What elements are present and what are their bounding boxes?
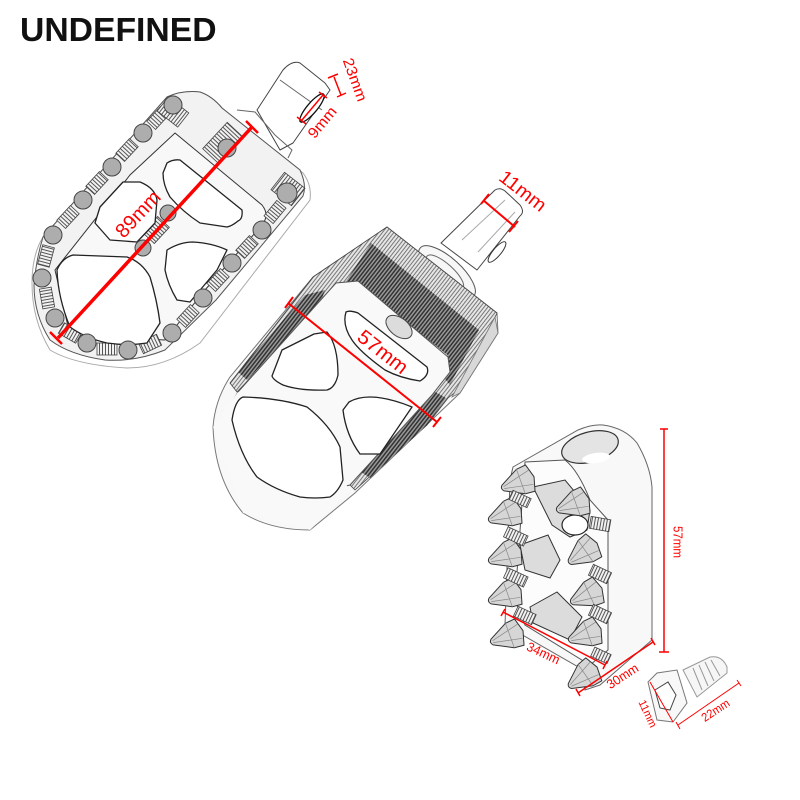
- dimension: 9mm: 9mm: [305, 103, 341, 142]
- axle: [411, 189, 522, 306]
- body: [505, 425, 652, 690]
- hole: upper left: [272, 332, 338, 390]
- right side face: [452, 317, 498, 397]
- ribbed band: light ends: [230, 227, 497, 490]
- dimension: 57mm height: 57mm: [671, 526, 686, 558]
- dimension: 22mm bolt: [676, 680, 741, 729]
- inner opening: [215, 281, 450, 510]
- dimension: 23mm: 23mm: [339, 56, 370, 104]
- hole: large: [57, 255, 160, 344]
- platform outline: [213, 227, 498, 530]
- dimension: 30mm: [576, 638, 655, 696]
- footpeg 3: spiked platform: [484, 425, 652, 698]
- inner frame: [55, 133, 266, 340]
- footpeg 1: toothed platform: [32, 62, 330, 368]
- dimension: 89mm length: [50, 121, 258, 344]
- hole: right: [165, 242, 227, 302]
- spikes: [484, 464, 608, 698]
- mounting hole: [558, 425, 622, 469]
- dimension: 22mm bolt: 22mm: [699, 696, 732, 725]
- dimension: 57mm width: 57mm: [353, 326, 412, 379]
- platform body: [34, 92, 304, 360]
- dimension: 11mm axle: [481, 167, 550, 232]
- hole: left: [95, 182, 157, 242]
- dimension: 57mm width: [285, 297, 441, 427]
- rib blocks: [38, 97, 305, 355]
- title: UNDEFINED: [20, 11, 217, 49]
- ribbed band: dark centres: [238, 243, 479, 478]
- mounting tab: [237, 62, 330, 158]
- cut-out: [562, 515, 588, 535]
- hole: upper centre: [163, 160, 242, 227]
- dimension: 23mm: [328, 56, 370, 104]
- dimension: 11mm bolt: 11mm: [636, 698, 659, 730]
- dimension: 89mm length: 89mm: [111, 187, 166, 242]
- front face: [515, 460, 608, 665]
- bolt: [648, 657, 727, 722]
- dimension: 57mm height: [659, 429, 686, 652]
- grit pads: [520, 480, 590, 640]
- platform outline: [32, 92, 310, 368]
- dimension: 34mm: 34mm: [524, 639, 562, 667]
- hole: top right: [345, 311, 428, 381]
- dimension: 11mm bolt: [636, 682, 673, 730]
- studs: [33, 96, 297, 359]
- ribbed tooth blocks: [503, 490, 612, 664]
- hole: large: [232, 397, 343, 498]
- dimension: 11mm axle: 11mm: [495, 167, 550, 217]
- dimension: 34mm: [501, 609, 607, 669]
- dimension: 9mm: [297, 92, 341, 142]
- bolt: [382, 311, 416, 343]
- footpeg 2: ribbed platform: [213, 189, 522, 530]
- hole: lower right: [343, 397, 412, 454]
- dimension: 30mm: 30mm: [604, 660, 641, 692]
